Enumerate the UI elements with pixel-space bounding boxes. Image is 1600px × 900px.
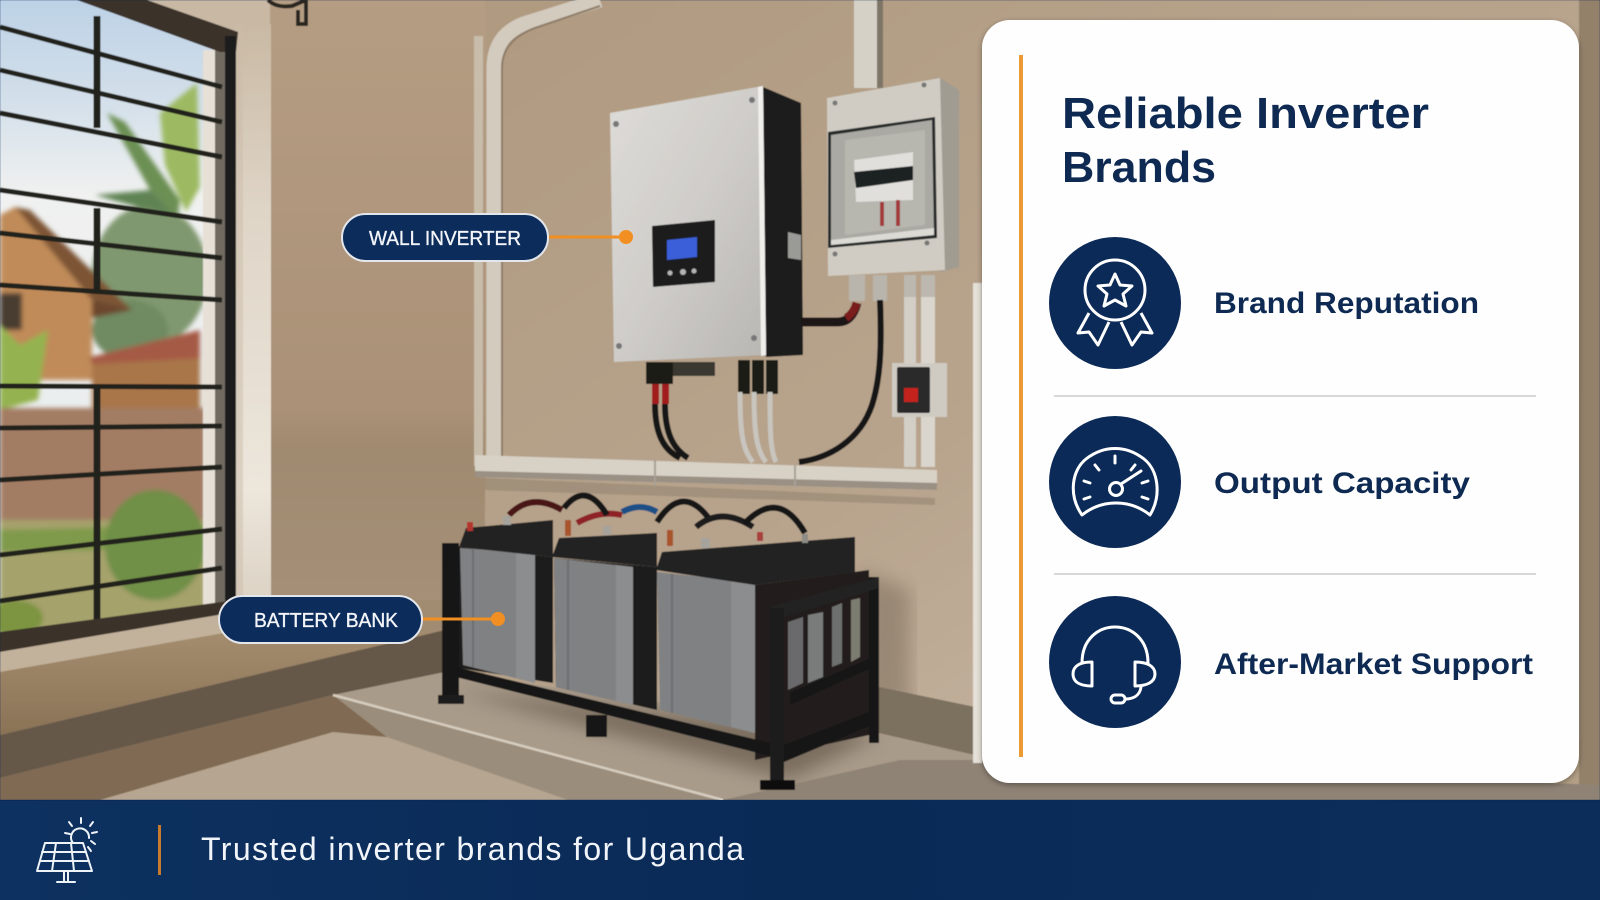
callout: battery bank: BATTERY BANK [254,610,399,632]
panel heading: Brands [1062,143,1216,192]
photo: battery bank [438,496,879,790]
photo: wall inverter [610,86,803,462]
rear rack panels [788,598,871,705]
photo: conduits and trunking [474,0,937,505]
footer bar [0,801,1600,900]
footer caption: Trusted inverter brands for Uganda [201,831,744,867]
callout: wall inverter: WALL INVERTER [369,228,521,250]
item: output capacity: Output Capacity [1214,467,1470,500]
photo: isolator switch [892,363,947,417]
battery 2 [552,533,657,710]
item: output capacity [1049,416,1470,548]
icon: solar panel and sun [37,818,97,882]
item: after-market support: After-Market Support [1214,648,1533,681]
panel heading: Reliable Inverter [1062,89,1429,138]
item: brand reputation: Brand Reputation [1214,287,1479,320]
callout: wall inverter [342,214,633,261]
battery 3 [656,537,869,760]
photo: view through window [0,0,236,650]
photo: breaker box [799,78,959,462]
callout: battery bank [219,596,505,643]
photo: window frame and bars [0,0,306,652]
panel heading [1062,89,1429,192]
battery cables [509,496,805,533]
battery terminals [467,516,808,548]
panel: reliable inverter brands [982,20,1579,783]
item: brand reputation [1049,237,1479,369]
item: after-market support [1049,596,1533,728]
battery 1 [459,520,553,683]
photo: sill, skirting and floor [0,283,1600,800]
